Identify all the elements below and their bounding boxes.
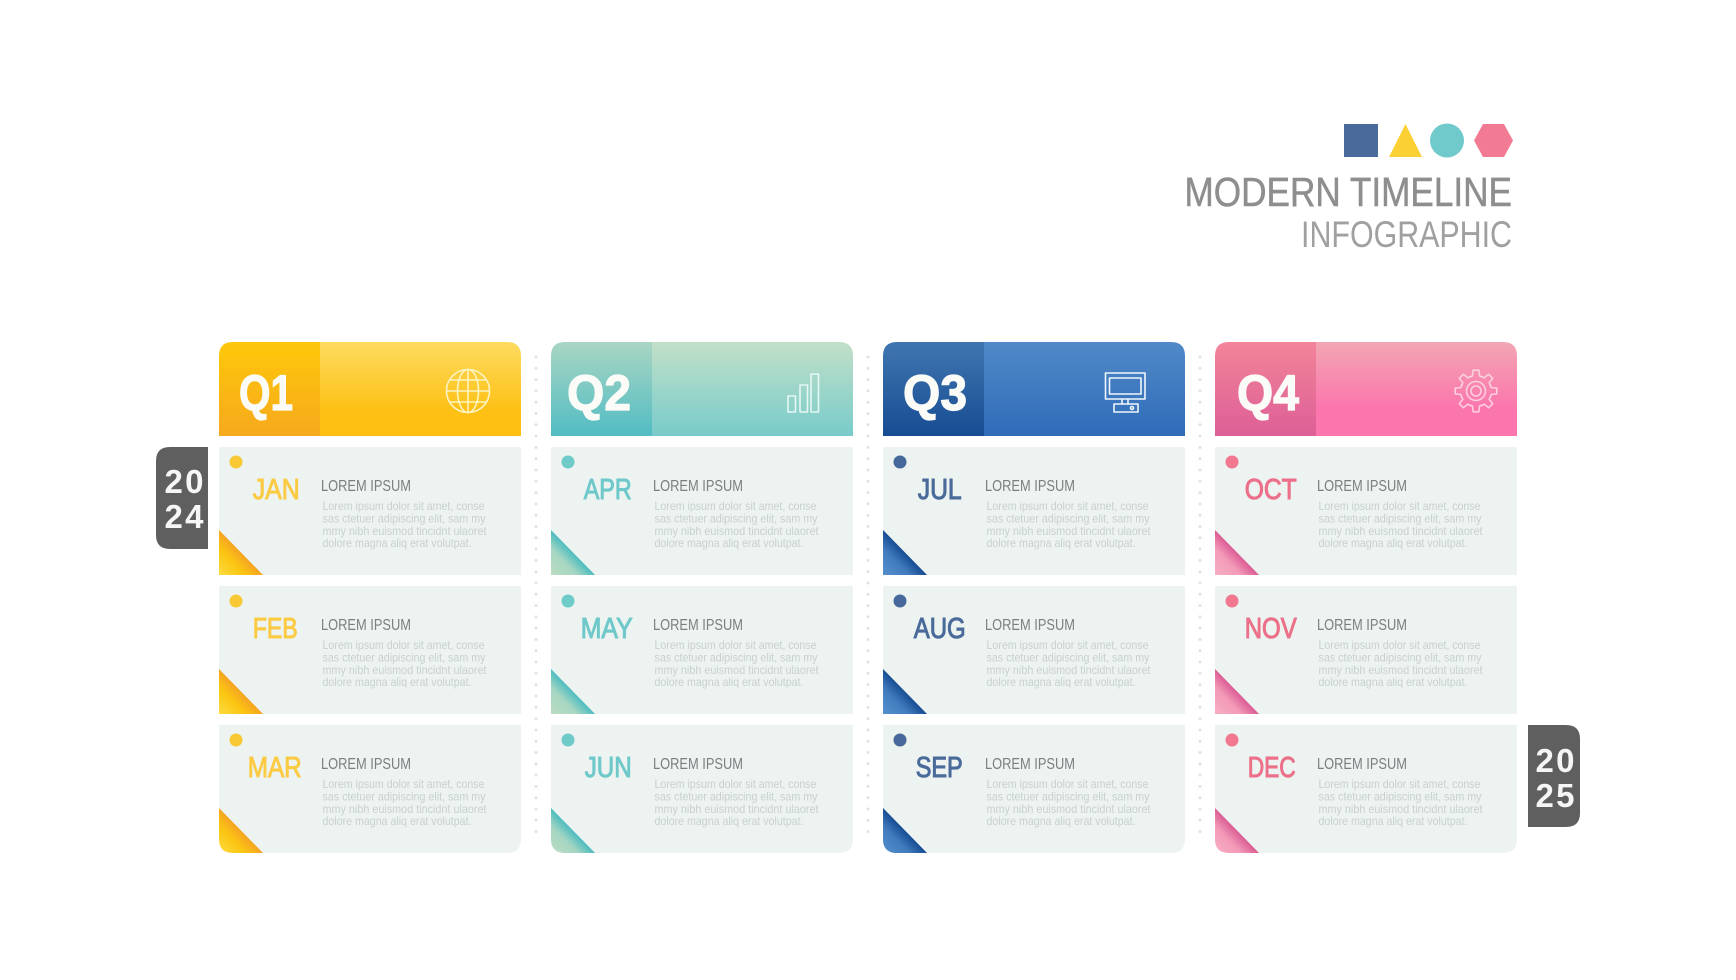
icon: blue square [1344,124,1378,157]
icon: yellow triangle [1389,124,1422,157]
card: NOV [1215,586,1517,714]
title line: infographic: INFOGRAPHIC [1301,214,1512,255]
card: APR: LOREM IPSUM [653,478,743,495]
card: MAR: Lorem ipsum dolor sit amet, conse [322,777,485,791]
card: JUN: dolore magna aliq erat volutpat. [654,814,804,828]
card: SEP: SEP [916,752,963,784]
card: FEB: LOREM IPSUM [321,617,411,634]
card: AUG: mmy nibh euismod tincidnt ulaoret [986,663,1151,677]
card: AUG: LOREM IPSUM [985,617,1075,634]
card: DEC: sas ctetuer adipiscing elit, sam my [1318,790,1482,804]
card: MAR: mmy nibh euismod tincidnt ulaoret [322,802,487,816]
panel: Q3 [883,342,1185,853]
card: DEC: dolore magna aliq erat volutpat. [1318,814,1468,828]
card: APR: sas ctetuer adipiscing elit, sam my [654,512,818,526]
card: OCT: OCT [1245,474,1297,506]
panel: Q4 [1215,342,1517,853]
header: Q2 [551,342,853,436]
card: DEC: Lorem ipsum dolor sit amet, conse [1318,777,1481,791]
card: OCT: LOREM IPSUM [1317,478,1407,495]
card: NOV: LOREM IPSUM [1317,617,1407,634]
card: JUL: Lorem ipsum dolor sit amet, conse [986,499,1149,513]
card: MAY: LOREM IPSUM [653,617,743,634]
card: JUN [551,725,853,853]
card: SEP: mmy nibh euismod tincidnt ulaoret [986,802,1151,816]
card: MAR: MAR [248,752,302,784]
card: JAN: mmy nibh euismod tincidnt ulaoret [322,524,487,538]
card: DEC: LOREM IPSUM [1317,756,1407,773]
year badge: 2024: 24 [164,498,204,535]
header: Q1 [219,342,521,436]
card: AUG: AUG [914,613,966,645]
card: JUN: mmy nibh euismod tincidnt ulaoret [654,802,819,816]
icon: bar chart [788,374,818,412]
dotted column separators [536,357,1200,842]
header: Q2: Q2 [567,365,631,421]
card: MAY: sas ctetuer adipiscing elit, sam my [654,650,818,664]
title [1184,169,1512,255]
card: JAN: dolore magna aliq erat volutpat. [322,536,472,550]
card: AUG: Lorem ipsum dolor sit amet, conse [986,638,1149,652]
card: MAR: sas ctetuer adipiscing elit, sam my [322,790,486,804]
card: JUL: sas ctetuer adipiscing elit, sam my [986,512,1150,526]
header: Q4: Q4 [1237,365,1299,421]
card: APR: dolore magna aliq erat volutpat. [654,536,804,550]
header: Q3: Q3 [903,365,967,421]
card: JAN: sas ctetuer adipiscing elit, sam my [322,512,486,526]
card: OCT: sas ctetuer adipiscing elit, sam my [1318,512,1482,526]
card: AUG [883,586,1185,714]
header: Q4 [1215,342,1517,436]
card: FEB: Lorem ipsum dolor sit amet, conse [322,638,485,652]
card: OCT: Lorem ipsum dolor sit amet, conse [1318,499,1481,513]
panel: Q1 [219,342,521,853]
card: DEC [1215,725,1517,853]
icon: globe [446,370,490,412]
card: OCT: dolore magna aliq erat volutpat. [1318,536,1468,550]
icon: gear [1455,370,1497,412]
card: MAR [219,725,521,853]
card: FEB: FEB [253,613,298,645]
card: SEP: LOREM IPSUM [985,756,1075,773]
card: FEB: sas ctetuer adipiscing elit, sam my [322,650,486,664]
year badge: 2024 [156,447,208,549]
card: JAN: LOREM IPSUM [321,478,411,495]
card: NOV: Lorem ipsum dolor sit amet, conse [1318,638,1481,652]
year badge: 2025: 25 [1536,777,1574,814]
card: FEB [219,586,521,714]
legend shapes [1344,124,1513,158]
title line: modern timeline: MODERN TIMELINE [1184,169,1512,215]
card: JUL: LOREM IPSUM [985,478,1075,495]
card: APR: Lorem ipsum dolor sit amet, conse [654,499,817,513]
card: AUG: dolore magna aliq erat volutpat. [986,675,1136,689]
card: APR: APR [584,474,632,506]
card: APR: mmy nibh euismod tincidnt ulaoret [654,524,819,538]
card: NOV: dolore magna aliq erat volutpat. [1318,675,1468,689]
card: MAY: MAY [581,613,633,645]
card: MAY: dolore magna aliq erat volutpat. [654,675,804,689]
card: NOV: NOV [1245,613,1297,645]
icon: pink hexagon [1474,124,1513,157]
header: Q1: Q1 [239,365,293,421]
card: MAY: mmy nibh euismod tincidnt ulaoret [654,663,819,677]
header: Q3 [883,342,1185,436]
card: MAY: Lorem ipsum dolor sit amet, conse [654,638,817,652]
card: SEP [883,725,1185,853]
year badge: 2025 [1528,725,1580,827]
card: OCT [1215,447,1517,575]
card: SEP: sas ctetuer adipiscing elit, sam my [986,790,1150,804]
card: JUN: sas ctetuer adipiscing elit, sam my [654,790,818,804]
card: JUL: dolore magna aliq erat volutpat. [986,536,1136,550]
panel: Q2 [551,342,853,853]
card: FEB: dolore magna aliq erat volutpat. [322,675,472,689]
card: FEB: mmy nibh euismod tincidnt ulaoret [322,663,487,677]
card: AUG: sas ctetuer adipiscing elit, sam my [986,650,1150,664]
card: JAN [219,447,521,575]
card: JUN: Lorem ipsum dolor sit amet, conse [654,777,817,791]
card: JAN: Lorem ipsum dolor sit amet, conse [322,499,485,513]
card: NOV: sas ctetuer adipiscing elit, sam my [1318,650,1482,664]
card: DEC: mmy nibh euismod tincidnt ulaoret [1318,802,1483,816]
year badge: 2025: 20 [1536,742,1574,779]
card: MAR: LOREM IPSUM [321,756,411,773]
card: JUN: LOREM IPSUM [653,756,743,773]
icon: teal circle [1430,124,1464,158]
card: SEP: Lorem ipsum dolor sit amet, conse [986,777,1149,791]
card: OCT: mmy nibh euismod tincidnt ulaoret [1318,524,1483,538]
icon: computer monitor [1106,373,1145,412]
year badge: 2024: 20 [164,463,204,500]
card: JUL: JUL [918,474,962,506]
card: JUL: mmy nibh euismod tincidnt ulaoret [986,524,1151,538]
card: DEC: DEC [1248,752,1296,784]
card: SEP: dolore magna aliq erat volutpat. [986,814,1136,828]
card: MAY [551,586,853,714]
card: JAN: JAN [253,474,300,506]
card: JUL [883,447,1185,575]
card: JUN: JUN [585,752,632,784]
card: NOV: mmy nibh euismod tincidnt ulaoret [1318,663,1483,677]
card: MAR: dolore magna aliq erat volutpat. [322,814,472,828]
card: APR [551,447,853,575]
